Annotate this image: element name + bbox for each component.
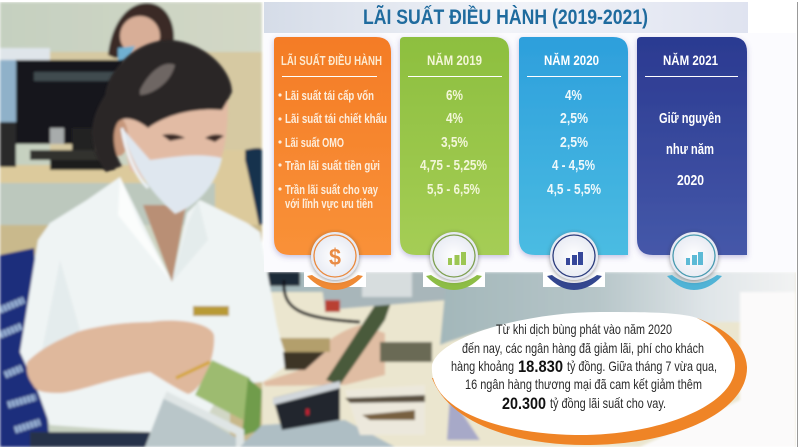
callout: ellipse with summary text: hàng khoảng bbox=[451, 358, 514, 374]
callout: ellipse with summary text bbox=[432, 312, 747, 445]
rate labels: Lãi suất tái cấp vốn bbox=[285, 88, 374, 103]
rate labels: với lĩnh vực ưu tiên bbox=[285, 196, 373, 211]
callout: ellipse with summary text: 20.300 bbox=[502, 394, 546, 413]
callout: ellipse with summary text: Từ khi dịch bùng phát vào năm 2020 bbox=[496, 321, 672, 337]
title: LÃI SUẤT ĐIỀU HÀNH (2019-2021) bbox=[363, 4, 648, 29]
rate labels: Trần lãi suất cho vay bbox=[285, 182, 379, 197]
panel: orange labels column bbox=[274, 37, 391, 255]
rate labels: Lãi suất OMO bbox=[285, 135, 344, 150]
panel: year 2020: 2,5% bbox=[560, 135, 588, 151]
rate labels: Lãi suất tái chiết khấu bbox=[285, 111, 387, 126]
callout: ellipse with summary text: tỷ đồng lãi suất cho vay. bbox=[550, 395, 666, 411]
icon: dollar coin bbox=[304, 232, 366, 290]
panel: year 2019: 4,75 - 5,25% bbox=[420, 158, 487, 174]
panel: year 2019 bbox=[400, 37, 509, 255]
callout: ellipse with summary text: tỷ đồng. Giữa tháng 7 vừa qua, bbox=[567, 358, 717, 374]
title band bbox=[264, 2, 748, 33]
panel: year 2021: Giữ nguyên bbox=[659, 111, 721, 127]
panel: year 2021: như năm bbox=[666, 142, 714, 158]
callout: ellipse with summary text: 18.830 bbox=[518, 357, 563, 376]
panel: year 2020: 4% bbox=[565, 88, 582, 104]
icon: navy bars bbox=[543, 232, 605, 290]
panel: year 2019: 4% bbox=[446, 111, 463, 127]
icon: dollar coin: $ bbox=[329, 244, 341, 270]
panel: year 2019: 5,5 - 6,5% bbox=[427, 182, 480, 198]
foreground woman head with face mask bbox=[92, 40, 232, 214]
panel: year 2020: 4 - 4,5% bbox=[552, 158, 595, 174]
page edge bbox=[796, 0, 800, 447]
column heading: LÃI SUẤT ĐIỀU HÀNH bbox=[281, 53, 382, 68]
panel: year 2021: 2020 bbox=[677, 173, 704, 189]
panel: year 2021: NĂM 2021 bbox=[663, 52, 718, 68]
panel: year 2020: 2,5% bbox=[560, 111, 588, 127]
panel: year 2019: 3,5% bbox=[441, 135, 468, 151]
panel: year 2019: 6% bbox=[446, 88, 463, 104]
panel: year 2020: NĂM 2020 bbox=[544, 52, 599, 68]
callout: ellipse with summary text: 16 ngân hàng thương mại đã cam kết giảm thêm bbox=[465, 376, 702, 392]
background panel behind the table bbox=[264, 33, 796, 272]
panel: year 2020 bbox=[519, 37, 628, 255]
icon: light blue bars bbox=[667, 232, 722, 290]
panel: year 2020: 4,5 - 5,5% bbox=[547, 182, 601, 198]
icon: green bars bbox=[423, 232, 485, 290]
panel: year 2021 bbox=[637, 37, 747, 255]
callout: ellipse with summary text: đến nay, các ngân hàng đã giảm lãi, phí cho khách bbox=[462, 340, 704, 356]
panel: year 2019: NĂM 2019 bbox=[427, 52, 482, 68]
rate labels bbox=[278, 88, 387, 211]
rate labels: Trần lãi suất tiền gửi bbox=[285, 158, 380, 173]
